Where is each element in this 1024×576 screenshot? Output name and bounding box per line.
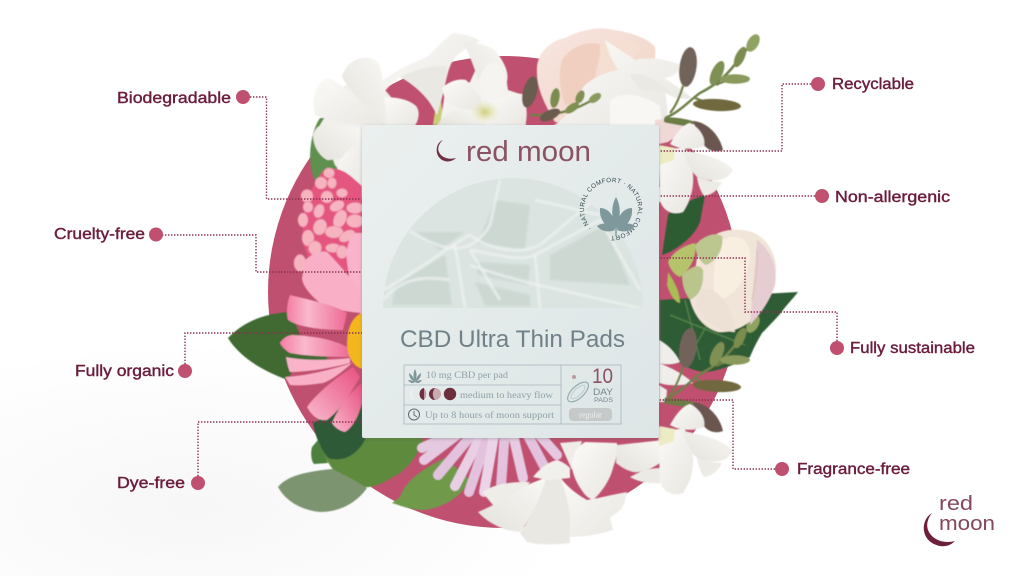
pink bud cluster: [294, 168, 364, 272]
white petals beside lower box edge: [659, 340, 693, 402]
info table: medium to heavy flow: [460, 390, 553, 401]
white flowers bottom: [478, 440, 663, 544]
pink petals by box corner: [655, 118, 684, 145]
peony: [667, 230, 776, 332]
label: Dye-free: Dye-free: [117, 475, 185, 492]
connector lines: [162, 84, 837, 476]
faint shadow wash: [0, 300, 640, 576]
natural comfort badge: · NATURAL COMFORT · NATURAL COMFORT: [580, 178, 642, 240]
clock icon: [408, 409, 420, 420]
floral arrangement: [228, 28, 798, 544]
lilac daisy: [422, 425, 557, 492]
pad count: [564, 365, 614, 421]
info table: 10 mg CBD per pad: [426, 371, 508, 381]
info table: Up to 8 hours of moon support: [425, 410, 554, 421]
upper freesia branch: [630, 32, 763, 213]
peach rose top right: [537, 28, 655, 125]
pad count: DAY: [593, 387, 614, 398]
product box: [360, 124, 660, 440]
leaf texture semicircle: [383, 178, 643, 308]
moon phases: [411, 388, 456, 400]
label: Recyclable: Recyclable: [832, 76, 914, 93]
calla lily top: [380, 33, 480, 125]
pad count: regular: [579, 410, 602, 420]
white flower top centre: [437, 42, 527, 126]
label: Fully sustainable: Fully sustainable: [850, 340, 975, 357]
info table: [404, 365, 621, 424]
box logo: red moon: [466, 136, 591, 168]
brand logo bottom right: moon: [939, 513, 995, 535]
branch of small buds centre: [519, 75, 603, 124]
white flower top right: [553, 40, 692, 126]
pad count: PADS: [594, 397, 614, 404]
product name: CBD Ultra Thin Pads: [400, 326, 625, 353]
lower freesia branch: [630, 313, 763, 494]
pad count: 10: [592, 365, 613, 388]
label: Non-allergenic: Non-allergenic: [835, 189, 950, 206]
brand logo bottom right: red: [939, 493, 973, 515]
pink daisy: [280, 233, 364, 432]
leaves behind flowers: [228, 118, 798, 512]
label: Fragrance-free: Fragrance-free: [797, 461, 910, 478]
white flower top left: [313, 58, 419, 198]
label: Fully organic: Fully organic: [75, 363, 174, 380]
label: Dye-free: [117, 475, 205, 492]
brand logo bottom right: [924, 493, 995, 546]
cannabis icon small: [408, 369, 422, 383]
label: Biodegradable: Biodegradable: [117, 90, 231, 107]
label: Cruelty-free: Cruelty-free: [54, 226, 145, 243]
crimson circle: [268, 56, 740, 528]
